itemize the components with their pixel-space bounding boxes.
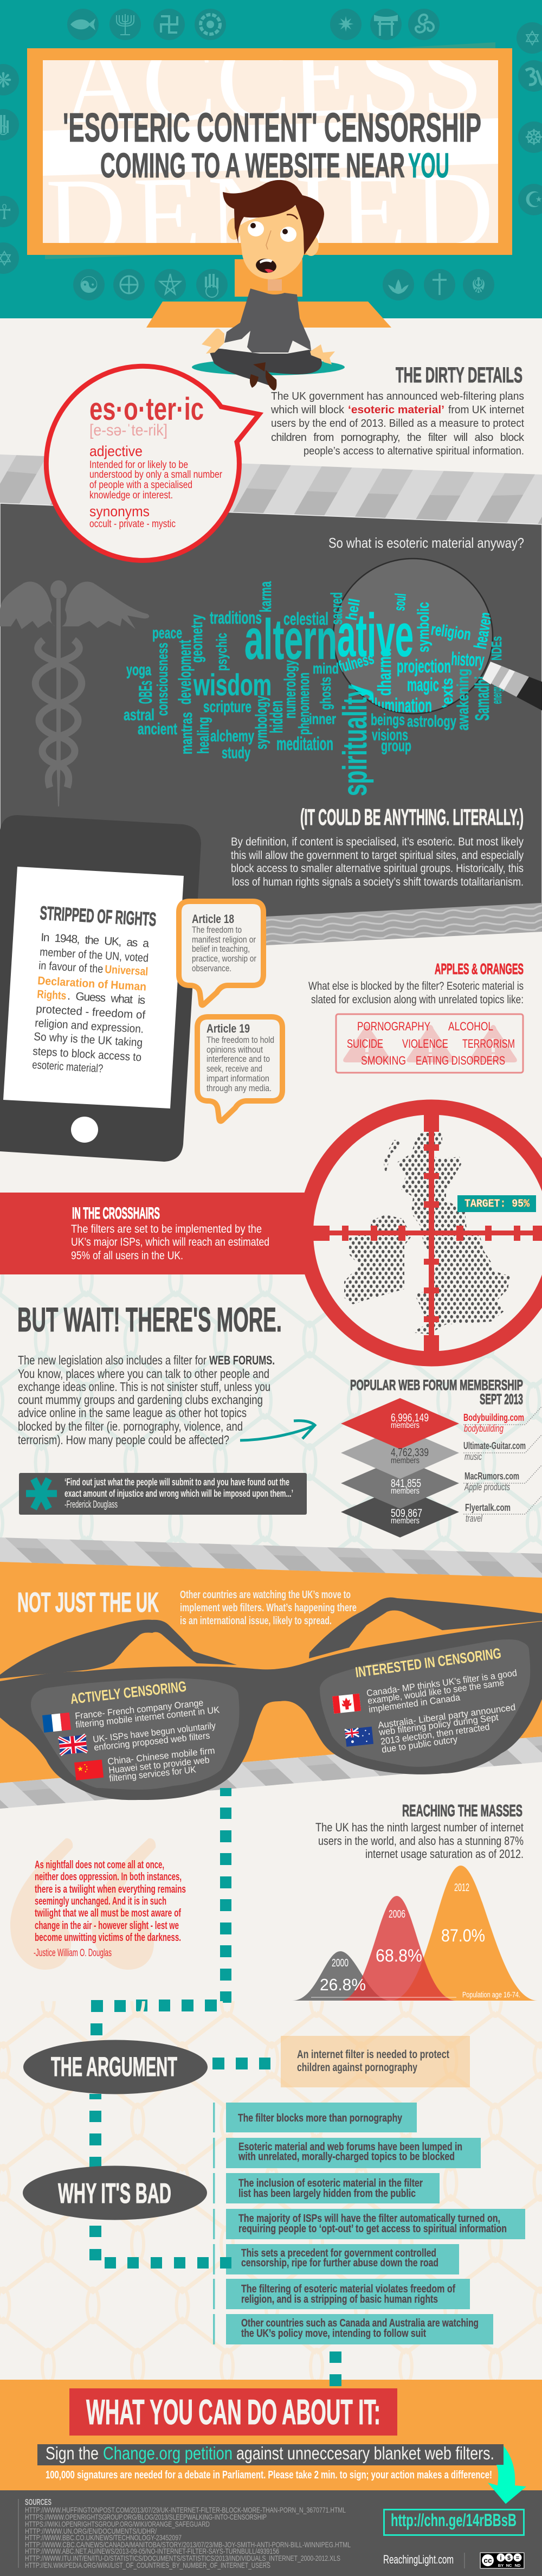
text block: dirty details: from UK internet <box>448 404 524 416</box>
reason 2 <box>213 2138 481 2168</box>
word cloud: Samadhi <box>471 676 493 721</box>
definition speech bubble: knowledge or interest. <box>89 490 173 501</box>
text block: dirty details: The UK government has announced web-filtering plans <box>271 390 524 402</box>
reason 5: This sets a precedent for government controlled <box>241 2247 436 2259</box>
text block: web forums: The new legislation also includes a filter for <box>18 1353 207 1367</box>
phone text: in favour of the <box>38 959 104 976</box>
phone text: Declaration of Human <box>37 975 147 994</box>
chain link fence background <box>0 1274 542 1567</box>
forum labels: Flyertalk.com <box>465 1502 511 1513</box>
definition speech bubble: occult - private - mystic <box>89 518 176 530</box>
word cloud: traditions <box>210 608 262 627</box>
religious symbols row <box>67 9 440 40</box>
phone text: protected - freedom of <box>36 1003 146 1022</box>
quote: Justice Douglas: As nightfall does not come all at once, <box>35 1859 164 1871</box>
chart: forum membership diamonds: members <box>391 1516 420 1526</box>
panel: in the crosshairs <box>0 1193 306 1274</box>
magnified words: hell <box>343 597 363 621</box>
panel: in the crosshairs: The filters are set to be implemented by the <box>71 1223 262 1235</box>
quote marks <box>10 1838 156 1970</box>
word cloud: NDEs <box>488 636 505 661</box>
access denied stamp: ACCESS <box>60 11 485 148</box>
text block: web forums: exchange ideas online. This is not sinister stuff, unless you <box>18 1380 270 1394</box>
word cloud: numerology <box>281 660 299 719</box>
religious symbols left column <box>0 64 19 274</box>
magnified words: texts <box>438 678 456 709</box>
sources: HTTP://WWW.HUFFINGTONPOST.COM/2013/07/29/UK-INTERNET-FILTER-BLOCK-MORE-THAN-PORN_N_3670771.HTML <box>25 2505 346 2514</box>
text block: web forums <box>18 1353 275 1447</box>
reason 2: with unrelated, morally-charged topics to be blocked <box>238 2151 455 2163</box>
chain link background lower <box>0 2001 542 2380</box>
phone text: Rights <box>37 988 67 1002</box>
connector stub over chain <box>91 2023 102 2035</box>
chart: internet usage bells: Population age 16-74. <box>462 1990 520 2000</box>
connector tick over reason five <box>220 2257 231 2269</box>
heading: but wait: BUT WAIT! THERE'S MORE. <box>17 1301 282 1339</box>
left lens: China- Chinese mobile firm <box>107 1745 215 1767</box>
speech bubble: article 19: Article 19 <box>207 1022 250 1035</box>
word cloud: energy <box>488 685 505 704</box>
quote: Justice Douglas: seemingly unchanged. And it is in such <box>35 1895 166 1907</box>
warning triangles <box>343 1025 517 1062</box>
magnifying glass lens <box>333 559 493 714</box>
heading: not just the UK: NOT JUST THE UK <box>17 1587 159 1618</box>
arrow to petition link <box>488 2446 526 2504</box>
text block: not just the UK: Other countries are watching the UK’s move to <box>180 1589 351 1601</box>
blocked topics box: PORNOGRAPHY <box>357 1020 430 1033</box>
word cloud: astral <box>124 706 154 724</box>
left lens: ACTIVELY CENSORING <box>69 1678 187 1707</box>
word cloud: peace <box>152 624 182 642</box>
flag: UK <box>59 1735 87 1755</box>
chart: internet usage bells: 87.0% <box>441 1926 485 1945</box>
text block: dirty details: users by the end of 2013. Billed as a measure to protect <box>271 418 524 430</box>
panel: orange section <box>0 1562 542 1783</box>
word cloud: spirituality <box>337 685 374 796</box>
right lens: Australia- Liberal party announced <box>377 1702 516 1731</box>
forum labels: MacRumors.com <box>464 1471 519 1482</box>
text block: reaching the masses <box>315 1821 524 1861</box>
blocked topics box <box>336 1014 523 1073</box>
left lens <box>31 1678 240 1790</box>
chart: internet usage bells: 68.8% <box>376 1946 422 1965</box>
chart: internet usage bells: 26.8% <box>320 1975 366 1994</box>
speech bubble: article 18: The freedom to <box>192 925 242 935</box>
right lens: example, would like to see the same <box>367 1677 505 1706</box>
illustration: meditating man <box>146 180 391 390</box>
title frame <box>27 42 512 259</box>
sources: HTTP://WWW.ABC.NET.AU/NEWS/2013-09-05/NO-INTERNET-FILTER-SAYS-TURNBULL/4939156 <box>25 2547 279 2555</box>
left lens: enforcing proposed web filters <box>93 1731 210 1753</box>
reason 1 <box>213 2103 417 2132</box>
chart: internet usage bells: 2012 <box>454 1882 469 1894</box>
magnified words: magic <box>407 675 439 695</box>
word cloud: phenomenon <box>295 672 312 735</box>
connector: why it's bad to reasons <box>89 2226 209 2269</box>
crosshair <box>313 1114 542 1351</box>
word cloud: mind <box>313 660 339 677</box>
word cloud: group <box>381 737 411 755</box>
word cloud: visions <box>372 726 408 744</box>
speech bubble: article 18: Article 18 <box>192 912 234 926</box>
magnified words: history <box>451 649 485 671</box>
argument box: An internet filter is needed to protect <box>297 2048 449 2061</box>
reason 4 <box>213 2209 525 2239</box>
icon: creative commons badge <box>480 2552 525 2569</box>
phone text: In 1948, the UK, as a <box>41 931 150 950</box>
sources: HTTP://WWW.BBC.CO.UK/NEWS/TECHNOLOGY-23452097 <box>25 2533 182 2542</box>
reason 1: The filter blocks more than pornography <box>238 2112 403 2124</box>
religious symbols bottom row: ☯ <box>79 272 99 298</box>
text block: apples and oranges <box>308 980 524 1006</box>
definition speech bubble: of people with a specialised <box>89 479 192 491</box>
chart: internet usage bells: 2000 <box>332 1957 349 1969</box>
text block: web forums: advice online in the same league as other hot topics <box>18 1406 247 1420</box>
blocked topics box: TERRORISM <box>462 1037 515 1050</box>
magnified words: projection <box>397 656 451 677</box>
sources: HTTPS://WIKI.OPENRIGHTSGROUP.ORG/WIKI/ORANGE_SAFEGUARD <box>25 2520 210 2528</box>
panel: in the crosshairs: IN THE CROSSHAIRS <box>72 1204 160 1222</box>
blocked topics box: SMOKING <box>361 1054 406 1067</box>
panel: phone <box>0 815 201 1162</box>
reason 7: the UK’s policy move, intending to follow suit <box>241 2328 426 2340</box>
quote: Justice Douglas: become unwitting victims of the darkness. <box>35 1932 181 1944</box>
connector: reasons to action <box>330 2351 341 2386</box>
speech bubble: article 19: through any media. <box>207 1083 272 1093</box>
flag: China <box>74 1760 104 1780</box>
speech bubble: article 19 <box>197 1017 282 1121</box>
word cloud: sacred <box>328 592 346 625</box>
blocked topics box: SUICIDE <box>347 1037 383 1050</box>
word cloud: OBEs <box>136 681 156 704</box>
heading: forum membership <box>350 1377 523 1407</box>
reason 6: The filtering of esoteric material violates freedom of <box>241 2283 455 2295</box>
quote: Justice Douglas: change in the air - however slight - lest we <box>35 1920 179 1932</box>
blocked topics box: VIOLENCE <box>402 1037 448 1050</box>
religious symbols bottom row: ☬ <box>471 273 486 298</box>
religious symbols row: ✷ <box>337 12 354 36</box>
icon: asterisk <box>26 1479 57 1509</box>
title <box>63 105 481 185</box>
word cloud: development <box>175 640 195 704</box>
phone text: member of the UN, voted <box>40 946 149 965</box>
word cloud: mantras <box>178 712 196 754</box>
reason 6: religion, and is a stripping of basic human rights <box>241 2293 438 2305</box>
sources: HTTP://EN.WIKIPEDIA.ORG/WIKI/LIST_OF_COUNTRIES_BY_NUMBER_OF_INTERNET_USERS <box>25 2561 270 2569</box>
quote: Justice Douglas: there is a twilight when everything remains <box>35 1883 186 1895</box>
why it's bad <box>23 2166 207 2220</box>
connector: dashed line to the argument <box>91 1788 231 2035</box>
sources: HTTP://WWW.CBC.CA/NEWS/CANADA/MANITOBA/STORY/2013/07/23/MB-JOY-SMITH-ANTI-PORN-BILL-WINNIPEG.HTML <box>25 2540 351 2549</box>
text block: dirty details: ‘esoteric material’ <box>348 404 444 416</box>
text block: web forums: terrorism). How many people could be affected? <box>18 1433 229 1447</box>
magnified words: illumination <box>368 694 432 716</box>
word cloud: ghosts <box>317 677 334 710</box>
access denied stamp: DENIED <box>45 149 495 279</box>
magnified words: symbolic <box>415 602 433 652</box>
word cloud: inner <box>309 710 336 727</box>
phone heading: STRIPPED OF RIGHTS <box>40 902 157 930</box>
forum labels: Apple products <box>464 1482 510 1492</box>
sources: HTTP://WWW.ITU.INT/EN/ITU-D/STATISTICS/DOCUMENTS/STATISTICS/2013/INDIVIDUALS_INTERNET_2000-2012.XLS <box>25 2554 340 2562</box>
panel: teal header background <box>0 0 542 318</box>
speech bubble: article 18 <box>179 901 263 1005</box>
word cloud: healing <box>195 717 212 754</box>
speech bubble: article 19: interference and to <box>207 1054 270 1064</box>
sources: HTTPS://WWW.OPENRIGHTSGROUP.ORG/BLOG/2013/SLEEPWALKING-INTO-CENSORSHIP <box>25 2513 267 2521</box>
reason 5: censorship, ripe for further abuse down the road <box>241 2257 438 2269</box>
text block: dirty details <box>270 390 525 457</box>
phone text: So why is the UK taking <box>34 1030 143 1049</box>
word cloud: geometry <box>188 614 206 663</box>
phone text <box>32 931 150 1075</box>
left lens: France- French company Orange <box>74 1697 204 1721</box>
phone text: . Guess what is <box>67 990 146 1007</box>
word cloud: consciousness <box>154 643 171 716</box>
panel: footer <box>0 2490 542 2576</box>
quote box: exact amount of injustice and wrong which will be imposed upon them...’ <box>64 1488 293 1499</box>
right lens: implemented in Canada <box>368 1692 461 1715</box>
blocked topics box: ALCOHOL <box>448 1020 493 1033</box>
forum labels: travel <box>466 1513 483 1524</box>
text block: not just the UK <box>180 1589 357 1627</box>
definition speech bubble: es·o·ter·ic <box>89 392 204 427</box>
definition speech bubble: synonyms <box>89 503 150 520</box>
panel: in the crosshairs: 95% of all users in the UK. <box>71 1249 183 1262</box>
speech bubble: article 19: impart information <box>207 1073 269 1084</box>
word cloud: karma <box>257 581 275 612</box>
reasons list <box>213 2103 525 2344</box>
phone text: esoteric material? <box>32 1059 104 1075</box>
magnified words: ity <box>337 683 374 721</box>
speech bubble: article 19: opinions without <box>207 1045 263 1055</box>
icon: creative commons badge: ND <box>515 2563 521 2568</box>
magnified words: ative <box>337 601 414 669</box>
quote: Justice Douglas <box>34 1859 186 1959</box>
petition banner <box>37 2443 504 2465</box>
quote box: -Frederick Douglass <box>64 1499 118 1510</box>
reason 2: Esoteric material and web forums have been lumped in <box>238 2141 462 2153</box>
text block: dirty details: children from pornography, the filter will also block <box>271 432 525 444</box>
reason 7: Other countries such as Canada and Australia are watching <box>241 2317 479 2329</box>
icon: creative commons badge: cc <box>483 2556 492 2565</box>
phone text: Universal <box>105 963 149 978</box>
speech bubble: article 19: The freedom to hold <box>207 1035 274 1045</box>
chart: forum membership diamonds: 841,855 <box>391 1477 421 1490</box>
word cloud: celestial <box>283 609 328 629</box>
word cloud: ancient <box>138 720 177 738</box>
text block: web forums: You know, places where you can talk to other people and <box>18 1367 269 1381</box>
definition speech bubble <box>46 366 259 560</box>
panel: dark section <box>0 503 542 946</box>
definition speech bubble: Intended for or likely to be <box>89 459 188 471</box>
panel: call to action <box>0 2380 542 2490</box>
word cloud: altern <box>244 608 337 671</box>
arrow to forum chart <box>240 1421 315 1440</box>
magnified words: soul <box>391 593 409 612</box>
text block: web forums: blocked by the filter (ie. pornography, violence, and <box>18 1419 243 1433</box>
chart: internet usage bells <box>292 1866 538 2001</box>
icon: caduceus <box>0 580 149 806</box>
quote: Justice Douglas: twilight that we all must be most aware of <box>35 1907 181 1919</box>
petition link box <box>384 2510 524 2535</box>
definition speech bubble: understood by only a small number <box>89 469 223 480</box>
hazard tape two <box>0 1537 542 1578</box>
right lens: web filtering policy during Sept <box>378 1712 499 1738</box>
target label <box>457 1195 536 1212</box>
access denied stamp <box>43 60 498 243</box>
reason 5 <box>213 2244 459 2274</box>
religious symbols bottom row <box>73 269 494 300</box>
chart: forum membership diamonds: members <box>391 1486 420 1496</box>
definition speech bubble: adjective <box>89 443 143 459</box>
hazard tape three <box>0 1736 542 1809</box>
left lens: filtering services for UK <box>108 1764 197 1784</box>
petition banner: Change.org petition <box>103 2443 233 2463</box>
chart: forum membership diamonds: members <box>391 1421 420 1430</box>
magnified words: heaven <box>470 611 496 650</box>
phone text: religion and expression. <box>35 1017 144 1036</box>
right lens: due to public outcry <box>381 1734 459 1755</box>
connector: argument to box <box>212 2058 270 2069</box>
hazard tape one <box>0 454 542 524</box>
rope divider <box>0 903 542 959</box>
argument box: children against pornography <box>297 2061 417 2074</box>
icon: creative commons badge: NC <box>506 2563 512 2568</box>
target label: TARGET: 95% <box>464 1198 530 1210</box>
reason 3: The inclusion of esoteric material in the filter <box>238 2177 423 2189</box>
reason 3: list has been largely hidden from the public <box>238 2188 416 2200</box>
chart: forum membership diamonds: 4,762,339 <box>391 1446 429 1459</box>
speech bubble: article 18: practice, worship or <box>192 953 256 964</box>
word cloud <box>124 581 505 796</box>
sunglasses <box>0 1597 542 1800</box>
speech bubble: article 18: manifest religion or <box>192 934 256 945</box>
quote: Justice Douglas: -Justice William O. Douglas <box>34 1947 112 1959</box>
panel: in the crosshairs: UK’s major ISPs, which will reach an estimated <box>71 1236 269 1248</box>
chart: forum membership diamonds: 6,996,149 <box>391 1412 429 1424</box>
word cloud: alchemy <box>210 727 254 745</box>
forum labels: bodybuilding <box>464 1423 504 1434</box>
speech bubble: article 19: seek, receive and <box>207 1063 262 1074</box>
why it's bad: WHY IT'S BAD <box>58 2178 171 2209</box>
word cloud: awakening <box>454 669 472 730</box>
magnifying glass handle <box>482 662 542 710</box>
word cloud: psychic <box>214 633 230 671</box>
word cloud: symbology <box>253 696 270 749</box>
target scope with UK map <box>306 1107 542 1359</box>
right lens: 2013 election, then retracted <box>380 1722 491 1747</box>
sources <box>18 2498 351 2569</box>
left lens: Huawei set to provide web <box>108 1755 210 1776</box>
chart: forum membership diamonds: 509,867 <box>391 1507 422 1520</box>
right lens <box>320 1639 530 1767</box>
magnified words <box>338 593 491 713</box>
right lens: Canada- MP thinks UK’s filter is a good <box>366 1668 518 1699</box>
text block: dirty details: which will block <box>270 404 345 416</box>
forum labels: music <box>464 1451 482 1462</box>
flag: China: ★ <box>77 1765 84 1773</box>
flag: Canada <box>332 1694 361 1714</box>
word cloud: astrology <box>407 713 456 730</box>
word cloud: beings <box>371 711 405 729</box>
word cloud: scripture <box>203 698 251 716</box>
magnified words: religion <box>430 620 472 644</box>
dotted UK map <box>344 1132 510 1334</box>
icon: creative commons badge: $ <box>507 2555 511 2561</box>
word cloud: meditation <box>276 734 333 754</box>
sources: SOURCES <box>25 2498 51 2507</box>
heading: what you can do <box>69 2388 397 2436</box>
reason 6 <box>213 2279 470 2309</box>
speech bubble: article 18: belief in teaching, <box>192 944 250 954</box>
flag: France <box>42 1713 71 1733</box>
petition banner: Sign the <box>46 2443 99 2463</box>
reason 7 <box>213 2314 493 2344</box>
flag: Australia <box>345 1727 373 1747</box>
religious symbols right column: ✡ <box>524 27 541 50</box>
phone text: steps to block access to <box>33 1045 142 1064</box>
text block: not just the UK: implement web filters. What’s happening there <box>180 1602 357 1614</box>
quote box: ‘Find out just what the people will submit to and you have found out the <box>64 1477 289 1488</box>
quote: Justice Douglas: neither does oppression. In both instances, <box>35 1871 182 1883</box>
quote box <box>19 1473 307 1515</box>
icon: creative commons badge: i <box>500 2555 502 2561</box>
the argument: THE ARGUMENT <box>51 2052 177 2082</box>
magnified words: dharma <box>375 649 395 696</box>
religious symbols right column <box>517 22 542 215</box>
connector: argument to why it's bad <box>89 2094 101 2168</box>
icon: creative commons badge: = <box>516 2555 519 2561</box>
left lens: UK- ISPs have begun voluntarily <box>92 1720 216 1745</box>
word cloud: yoga <box>126 661 151 679</box>
text block: dirty details: people’s access to alternative spiritual information. <box>304 445 524 457</box>
magnified words: fulness <box>337 650 376 676</box>
title: YOU <box>408 146 449 185</box>
text block: definition paragraph <box>231 836 524 888</box>
text block: web forums: count mummy groups and gardening clubs exchanging <box>18 1393 263 1407</box>
text block: web forums: WEB FORUMS. <box>209 1353 275 1367</box>
blocked topics box: EATING DISORDERS <box>416 1054 505 1067</box>
sources: HTTP://WWW.UN.ORG/EN/DOCUMENTS/UDHR/ <box>25 2527 157 2535</box>
chart: forum membership diamonds: members <box>391 1456 420 1465</box>
speech bubble: article 18: observance. <box>192 963 231 973</box>
left lens: filtering mobile internet content in UK <box>75 1704 221 1730</box>
definition speech bubble: [e-sə-ˈte-rik] <box>89 421 167 439</box>
forum labels <box>463 1406 542 1524</box>
word cloud: study <box>222 744 250 762</box>
text block: not just the UK: is an international issue, likely to spread. <box>180 1615 332 1627</box>
word cloud: hidden <box>267 701 286 733</box>
credit: ReachingLight.com <box>383 2553 454 2566</box>
chart: forum membership diamonds <box>341 1398 542 1537</box>
reason 3 <box>213 2173 440 2203</box>
argument box <box>281 2036 470 2087</box>
icon: creative commons badge: BY <box>498 2563 504 2568</box>
the argument <box>23 2040 208 2094</box>
word cloud: wisdom <box>193 668 272 702</box>
chart: internet usage bells: 2006 <box>389 1908 405 1920</box>
